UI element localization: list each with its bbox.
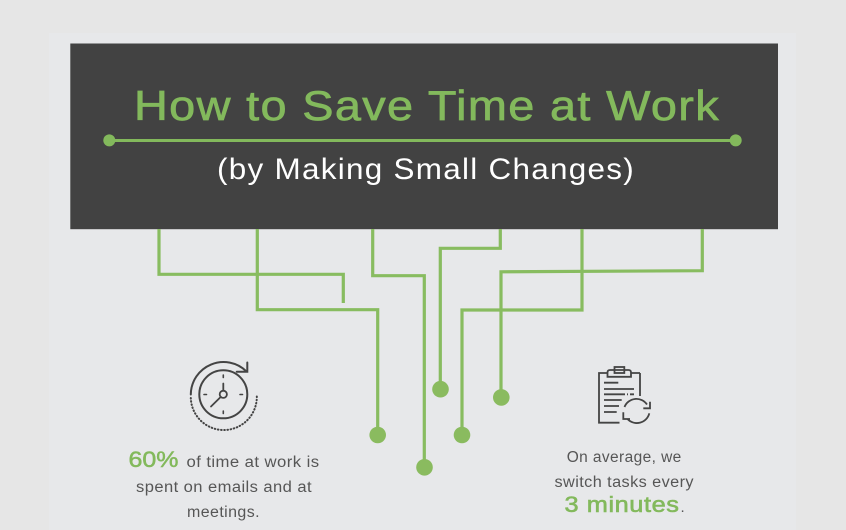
- subtitle: (by Making Small Changes): [217, 153, 635, 186]
- text block: task switching statistic: 3 minutes: [564, 492, 680, 517]
- divider line with end dots: [103, 134, 742, 146]
- text block: task switching statistic: .: [680, 499, 685, 516]
- text block: task switching statistic: [554, 449, 694, 517]
- text block: 60% statistic: of time at work is: [186, 454, 320, 471]
- text block: 60% statistic: [128, 447, 320, 521]
- connector lines: [159, 229, 702, 476]
- connector 3: line to dot: [373, 229, 433, 476]
- text block: task switching statistic: switch tasks every: [554, 474, 694, 491]
- connector 1: short line with no dot: [159, 229, 343, 303]
- text block: 60% statistic: meetings.: [187, 504, 260, 521]
- icon: clock with circular arrow: [191, 362, 257, 430]
- text block: task switching statistic: On average, we: [567, 449, 682, 466]
- title: How to Save Time at Work: [134, 82, 720, 129]
- connector 4: line to dot: [432, 229, 500, 398]
- connector 2: line to dot: [257, 229, 386, 443]
- text block: 60% statistic: spent on emails and at: [136, 479, 312, 496]
- text block: 60% statistic: 60%: [128, 447, 178, 472]
- panel: header banner: [70, 44, 778, 229]
- connector 6: line to dot: [493, 229, 702, 406]
- icon: clipboard with refresh arrows: [599, 367, 650, 423]
- connector 5: line to dot: [454, 229, 582, 443]
